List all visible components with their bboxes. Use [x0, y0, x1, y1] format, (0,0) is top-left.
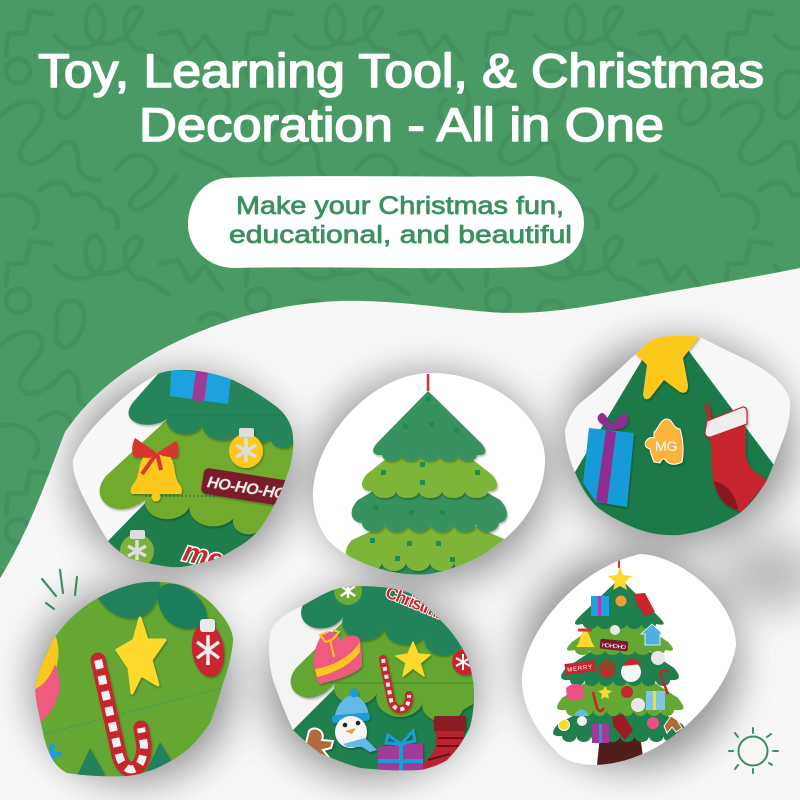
gift box — [583, 413, 634, 507]
HO-HO-HO sign — [201, 468, 286, 507]
stitched seam — [145, 415, 285, 496]
subtitle pill: Make your Christmas fun, — [236, 192, 564, 220]
subtitle pill — [188, 176, 584, 268]
top dark tier — [129, 366, 295, 448]
HO-HO-HO sign: HO-HO-HO — [206, 474, 288, 504]
panel: close-up star and candy cane — [30, 576, 233, 780]
Christmas sticker: Christmas — [383, 583, 457, 627]
seam — [330, 682, 474, 684]
yellow star — [396, 642, 430, 676]
panel: close-up star, gift and stocking — [560, 335, 790, 545]
dark scallops — [75, 576, 207, 780]
stocking — [423, 716, 466, 770]
green header wave with squiggle pattern — [0, 0, 800, 578]
title: Decoration - All in One — [139, 98, 664, 151]
title — [38, 44, 764, 151]
red bauble — [452, 649, 472, 678]
MG puzzle tag — [645, 419, 683, 464]
gingerbread man — [300, 729, 335, 768]
gift box — [170, 369, 231, 404]
soft grey shadows — [33, 340, 800, 782]
panel: close-up gifts and snowman — [269, 586, 474, 770]
velcro dots — [370, 396, 480, 562]
blue snowflake — [48, 744, 62, 762]
lower dark tier — [293, 688, 474, 770]
stitch line — [40, 688, 222, 735]
stocking — [705, 404, 768, 512]
lower dark tier — [108, 492, 281, 568]
middle light tier — [100, 415, 300, 534]
tree tiers — [346, 391, 512, 580]
candy cane — [383, 659, 409, 709]
star topper — [632, 335, 700, 399]
star — [117, 618, 165, 693]
green bauble — [120, 530, 154, 564]
heart gift box — [314, 630, 362, 684]
middle light tier — [291, 620, 480, 722]
trunk — [597, 735, 644, 766]
tree tiers — [553, 578, 687, 742]
merry sticker: mer — [180, 536, 240, 579]
red bauble — [188, 619, 228, 679]
subtitle pill: educational, and beautiful — [229, 221, 572, 249]
yellow snowflake bauble — [229, 428, 263, 468]
ornaments — [558, 593, 682, 743]
bell ornament — [131, 438, 182, 502]
hanging loop — [427, 374, 429, 391]
panel: plain felt tree — [313, 373, 545, 580]
pink and yellow gift edge — [35, 636, 60, 723]
MG puzzle tag: MG — [655, 438, 678, 454]
title: Toy, Learning Tool, & Christmas — [38, 44, 764, 97]
top dark tier — [301, 585, 480, 656]
ornaments: MERRY — [567, 664, 593, 674]
candy cane — [98, 660, 144, 769]
icon: sun — [729, 728, 778, 773]
green felt — [575, 350, 774, 536]
hanging loop — [618, 558, 620, 568]
panel: close-up bell and HO-HO-HO — [73, 366, 300, 580]
star — [608, 567, 632, 590]
snowflake bauble — [334, 586, 362, 605]
ornaments: HO-HO-HO — [602, 643, 626, 651]
gift box — [378, 731, 423, 775]
panel: fully decorated tree — [522, 554, 736, 766]
icon: sparkle burst — [42, 570, 77, 609]
snowman — [332, 688, 377, 752]
